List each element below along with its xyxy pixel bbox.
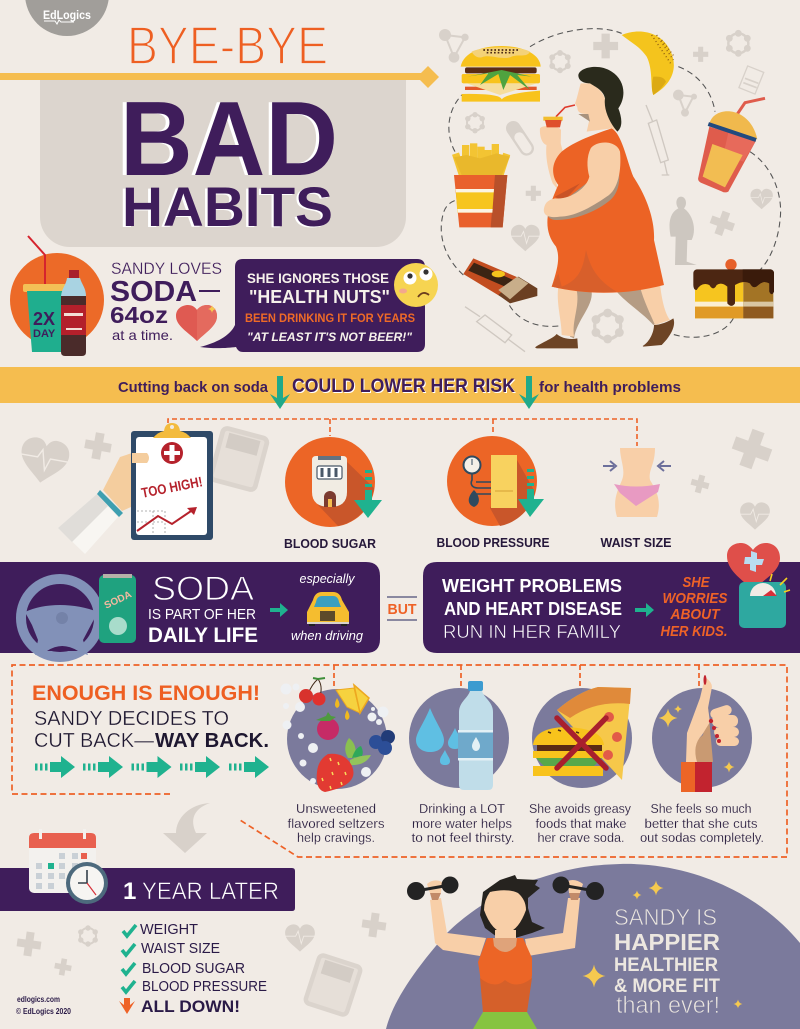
arrows: dashed row	[35, 756, 269, 778]
banner: 1 year later	[0, 868, 295, 911]
title panel	[40, 78, 406, 247]
label: blood sugar: BLOOD SUGAR	[284, 536, 377, 551]
illustration: woman with junk food	[439, 29, 781, 352]
caption: feels better: She feels so much	[650, 801, 752, 816]
caption: avoids greasy foods: She avoids greasy	[529, 801, 631, 816]
icon: soda can: SODA	[103, 589, 134, 612]
text: she worries about her kids: HER KIDS.	[660, 623, 728, 640]
text: she worries about her kids: ABOUT	[670, 606, 721, 623]
icon: doctor with clipboard, too high	[58, 423, 213, 554]
figure: woman drinking soda	[535, 67, 674, 348]
icon: thumbs up	[652, 675, 752, 792]
food: croissant	[622, 31, 674, 95]
arrow: to worries	[635, 603, 654, 617]
text: she worries about her kids	[660, 574, 728, 640]
arrow: to driving	[270, 603, 288, 617]
text: Sandy is happier: HEALTHIER	[614, 955, 718, 976]
text block: enough is enough: CUT BACK—	[34, 730, 154, 752]
caption: water	[412, 801, 514, 845]
logo: EdLogics: EdLogics	[43, 8, 91, 22]
food: burger	[461, 46, 541, 102]
checklist: WEIGHT	[140, 921, 198, 938]
icon: blood pressure	[447, 436, 544, 526]
faded health icons	[439, 29, 773, 352]
checklist: BLOOD PRESSURE	[142, 978, 267, 995]
panel: soda daily life: DAILY LIFE	[148, 624, 258, 647]
icon: steering wheel	[21, 579, 99, 657]
banner: 1 year later: 1	[123, 878, 136, 905]
panel: family history: RUN IN HER FAMILY	[443, 622, 621, 642]
caption: avoids greasy foods	[529, 801, 631, 845]
label: BUT	[387, 596, 417, 621]
callout: speech bubble: BEEN DRINKING IT FOR YEARS	[245, 313, 415, 325]
text: she worries about her kids: SHE	[682, 574, 710, 591]
title: HABITS: HABITS	[122, 175, 333, 238]
title: HABITS: HABITS	[119, 176, 331, 239]
title: BAD: BAD	[120, 80, 338, 198]
text block: Sandy loves soda	[110, 260, 222, 343]
text block: enough is enough: SANDY DECIDES TO	[34, 708, 229, 730]
panel: soda daily life: SODA	[152, 570, 254, 608]
icon: calendar and clock	[29, 829, 108, 904]
dashed food ring	[441, 29, 781, 337]
icon: doctor with clipboard, too high: TOO HIGH!	[140, 473, 204, 501]
panel: family history: WEIGHT PROBLEMS	[442, 576, 622, 596]
checklist: BLOOD SUGAR	[142, 960, 245, 977]
icon: soda can	[99, 574, 136, 643]
caption: water: Drinking a LOT	[419, 801, 505, 816]
icon: soda cup and bottle, 2X day: 2X	[33, 309, 55, 329]
icon: blood sugar	[285, 437, 382, 527]
caption: seltzers	[288, 801, 385, 845]
footer credit	[16, 994, 71, 1016]
footer credit: edlogics.com	[17, 994, 60, 1004]
text block: Sandy loves soda: SANDY LOVES	[111, 260, 222, 278]
text: Sandy is happier	[614, 904, 720, 1019]
caption: water: to not feel thirsty.	[412, 830, 514, 845]
text: she worries about her kids: WORRIES	[662, 590, 728, 607]
callout: speech bubble	[200, 259, 425, 352]
icon: soda cup and bottle, 2X day: DAY	[33, 328, 56, 340]
food: soda cup	[698, 98, 765, 192]
panel: family history	[423, 562, 800, 653]
checklist	[119, 921, 267, 1016]
icons: sparkles	[582, 880, 742, 1008]
panel: slate hill	[386, 864, 800, 1029]
banner: cutting back on soda: COULD LOWER HER RISK	[293, 377, 516, 398]
caption: seltzers: Unsweetened	[296, 801, 376, 816]
caption: feels better	[640, 801, 764, 845]
banner: cutting back on soda	[0, 367, 800, 403]
callout: speech bubble: SHE IGNORES THOSE	[247, 270, 389, 286]
text block: enough is enough	[32, 682, 269, 752]
icon: heart and scale	[727, 543, 790, 628]
caption: avoids greasy foods: foods that make	[536, 816, 626, 831]
icon: rolling-eyes emoji	[394, 263, 438, 307]
text: Sandy is happier: & MORE FIT	[614, 976, 720, 997]
label: blood pressure: BLOOD PRESSURE	[436, 535, 550, 550]
text: Sandy is happier: HAPPIER	[614, 929, 720, 955]
faded icons: right of risks	[689, 424, 777, 530]
footer credit: © EdLogics 2020	[16, 1006, 71, 1016]
text block: Sandy loves soda: SODA	[110, 276, 197, 308]
banner: cutting back on soda: Cutting back on soda	[118, 379, 269, 396]
faded icons: left of risks	[17, 427, 268, 491]
faded icons: lower	[15, 911, 388, 1016]
logo: EdLogics	[25, 0, 109, 36]
dashed box: enough is enough	[12, 665, 787, 857]
icon: soda cup and bottle, 2X day	[10, 236, 104, 356]
text block: enough is enough: WAY BACK.	[155, 730, 269, 752]
label: waist size: WAIST SIZE	[600, 535, 672, 550]
icon: no pizza and burger	[532, 687, 632, 788]
dashed drops	[334, 665, 699, 687]
text: Sandy is happier: SANDY IS	[614, 904, 717, 930]
dashed connector: risks	[168, 419, 637, 446]
icon: fruit seltzer	[280, 678, 395, 792]
text: Sandy is happier: than ever!	[616, 992, 720, 1019]
caption: seltzers: flavored seltzers	[288, 816, 385, 831]
checklist: WAIST SIZE	[141, 940, 220, 957]
panel: soda daily life	[0, 562, 380, 657]
food: cake	[693, 259, 774, 318]
panel: soda daily life: IS PART OF HER	[148, 606, 256, 623]
caption: feels better: better that she cuts	[644, 816, 758, 831]
icon: heart	[176, 305, 217, 341]
caption: water: more water helps	[412, 816, 512, 831]
title: BYE-BYE: BYE-BYE	[127, 16, 328, 76]
food: chocolate bar	[463, 258, 537, 303]
text block: Sandy loves soda: 64oz	[110, 302, 168, 328]
arrow: curved down	[163, 803, 210, 853]
arrow: down left	[270, 376, 290, 409]
label: BUT: BUT	[388, 601, 416, 618]
panel: soda daily life: when driving	[291, 629, 363, 643]
callout: speech bubble: "HEALTH NUTS"	[249, 287, 390, 307]
callout: speech bubble: "AT LEAST IT'S NOT BEER!"	[247, 330, 412, 344]
text block: Sandy loves soda: at a time.	[112, 327, 173, 343]
food: fries	[452, 143, 510, 227]
banner: cutting back on soda: COULD LOWER HER RISK	[292, 376, 515, 397]
icon: car	[307, 592, 349, 626]
checklist: ALL DOWN!	[141, 997, 240, 1016]
panel: family history: AND HEART DISEASE	[444, 599, 622, 619]
panel: soda daily life: especially	[300, 572, 355, 586]
arrow: down right	[519, 376, 539, 409]
text block: enough is enough: ENOUGH IS ENOUGH!	[32, 682, 260, 705]
banner: 1 year later: YEAR LATER	[142, 878, 279, 905]
title: BAD: BAD	[116, 80, 335, 198]
icon: water bottle and drops	[409, 681, 509, 790]
banner: cutting back on soda: for health problems	[539, 379, 681, 396]
caption: feels better: out sodas completely.	[640, 830, 764, 845]
caption: avoids greasy foods: her crave soda.	[538, 830, 624, 845]
figure: woman with dumbbells	[407, 875, 604, 1029]
icon: waist	[603, 448, 671, 517]
caption: seltzers: help cravings.	[297, 830, 375, 845]
title rule	[0, 66, 439, 88]
